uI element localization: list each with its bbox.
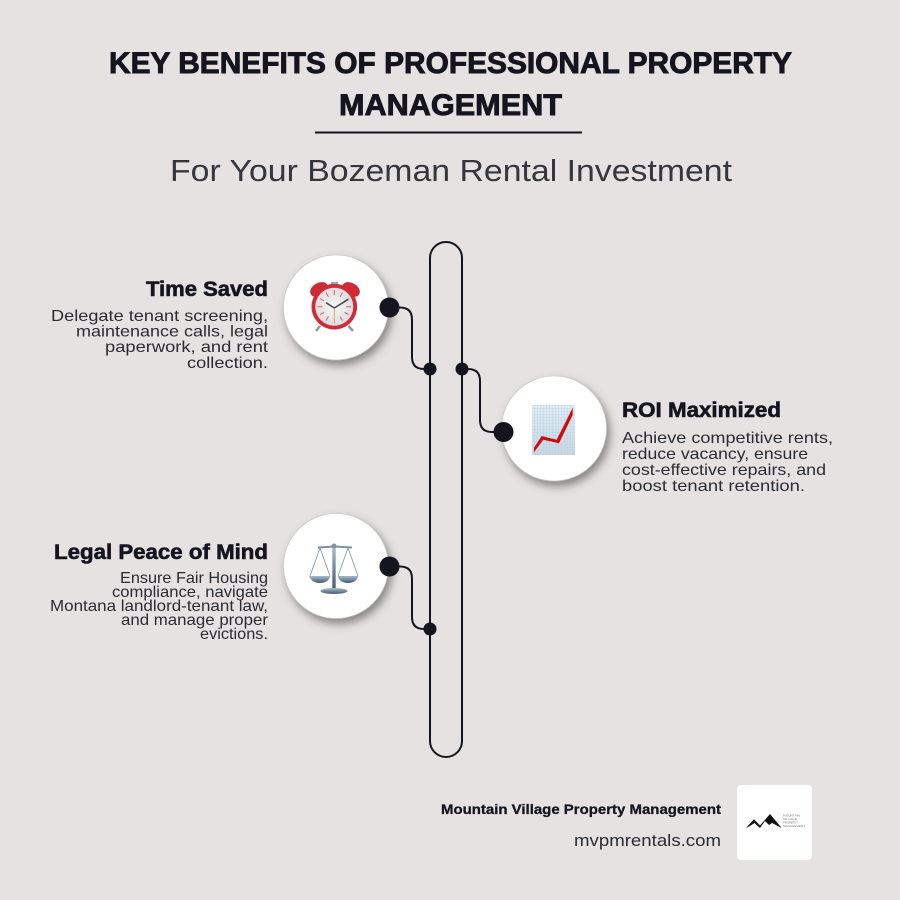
- text: ROI description: Achieve competitive rents,: [622, 430, 833, 447]
- icon: alarm clock: [308, 279, 362, 331]
- subtitle: For Your Bozeman Rental Investment: [170, 153, 732, 188]
- icon: rising chart: [532, 405, 575, 455]
- heading: time saved: Time Saved: [146, 278, 268, 301]
- text: ROI description: cost-effective repairs, and: [622, 462, 826, 479]
- logo: MOUNTAIN: [783, 814, 800, 818]
- title: KEY BENEFITS OF PROFESSIONAL PROPERTY: [109, 47, 792, 80]
- text: time saved description: paperwork, and rent: [105, 339, 269, 356]
- connector: legal peace of mind: [390, 566, 436, 636]
- connector: time saved: [390, 308, 436, 376]
- node: legal peace of mind: [380, 556, 400, 576]
- text: legal description: and manage proper: [121, 612, 269, 629]
- text: legal description: compliance, navigate: [112, 584, 268, 601]
- heading: ROI maximized: ROI Maximized: [622, 399, 781, 422]
- icon: balance scales: [309, 544, 358, 594]
- title underline: [315, 132, 582, 134]
- central timeline pill: [430, 242, 462, 757]
- logo: VILLAGE: [783, 817, 797, 821]
- text: legal description: [50, 570, 269, 643]
- text: ROI description: reduce vacancy, ensure: [622, 446, 808, 463]
- text: legal description: Ensure Fair Housing: [120, 570, 268, 587]
- text: ROI description: [622, 430, 833, 495]
- text: legal description: Montana landlord-tenant law,: [50, 598, 268, 615]
- node: ROI maximized: [494, 422, 514, 442]
- icon circle: scales: [284, 514, 388, 618]
- panel: ROI maximized: [502, 376, 833, 495]
- logo: PROPERTY: [783, 820, 798, 824]
- heading: legal peace of mind: Legal Peace of Mind: [54, 541, 268, 564]
- icon circle: alarm clock: [284, 255, 388, 360]
- panel: time saved: [51, 255, 388, 372]
- text: legal description: evictions.: [200, 626, 268, 643]
- logo: MANAGEMENT: [783, 824, 805, 828]
- node: time saved: [380, 298, 400, 318]
- text: ROI description: boost tenant retention.: [622, 478, 805, 495]
- text: time saved description: collection.: [187, 355, 268, 372]
- text: time saved description: [51, 308, 269, 372]
- panel: legal peace of mind: [50, 514, 388, 643]
- footer: website: mvpmrentals.com: [574, 831, 721, 850]
- title: [109, 47, 792, 122]
- icon circle: chart: [502, 376, 606, 481]
- title: MANAGEMENT: [339, 89, 562, 122]
- connector: ROI maximized: [456, 362, 504, 432]
- text: time saved description: Delegate tenant screening,: [51, 308, 268, 325]
- text: time saved description: maintenance calls, legal: [76, 324, 268, 340]
- footer: company name: Mountain Village Property Management: [441, 801, 721, 817]
- logo: [737, 785, 812, 860]
